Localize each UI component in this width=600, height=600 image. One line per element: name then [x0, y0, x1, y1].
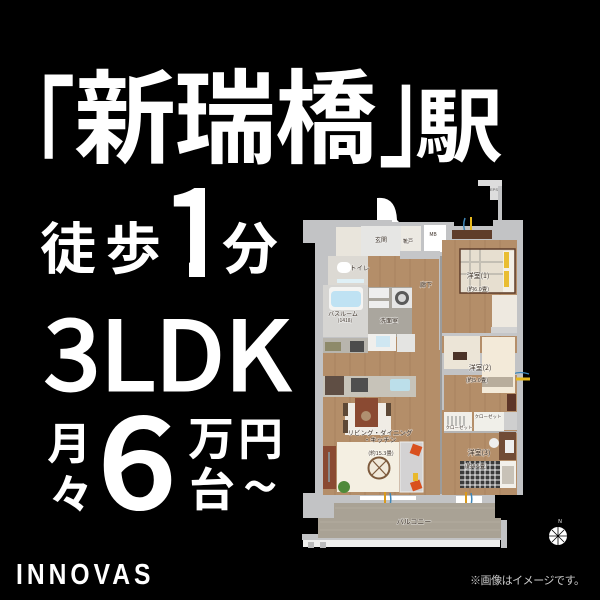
bedroom 3 [444, 431, 517, 488]
title: 新 [74, 38, 176, 185]
sofa [400, 442, 423, 492]
heading: walking time: 1 [161, 138, 232, 312]
room labels: (約15.3畳) [368, 449, 394, 457]
heading: monthly price: 万 [188, 403, 234, 469]
room labels [328, 231, 502, 527]
kitchen counter top [323, 338, 368, 353]
floor plan [302, 180, 530, 548]
room labels: (約5.0畳) [466, 376, 488, 384]
compass [549, 519, 567, 545]
living rug [337, 442, 399, 492]
heading: monthly price [47, 367, 283, 542]
toilet room [328, 256, 368, 286]
dining table [343, 398, 391, 435]
balcony [303, 503, 507, 548]
closets [444, 412, 517, 431]
heading: monthly price: 月 [47, 408, 91, 472]
PS box [491, 327, 517, 335]
heading: walking time [40, 138, 278, 312]
room labels: 洋室(2) [469, 363, 491, 373]
entrance door [377, 198, 399, 222]
title: 駅 [415, 63, 503, 179]
washroom [368, 287, 412, 337]
window arrows [384, 492, 386, 510]
bedroom 1 [452, 230, 515, 293]
window sills [360, 496, 416, 500]
compass: N [558, 519, 562, 525]
kitchen counter island [323, 376, 416, 397]
title: 」 [379, 12, 465, 191]
heading: walking time: 歩 [105, 205, 161, 286]
tv board [323, 446, 336, 489]
heading: walking time: 徒 [40, 205, 96, 286]
room labels: クローゼット [446, 424, 472, 431]
floor grain [335, 240, 500, 495]
room labels: 玄関 [375, 235, 387, 244]
round coffee table [368, 458, 390, 478]
heading: monthly price: 円 [238, 403, 283, 468]
footnote: ※画像はイメージです。 [470, 574, 585, 587]
room labels: (約4.5畳) [465, 462, 487, 470]
room labels: バルコニー [397, 517, 431, 527]
heading: monthly price: 台 [189, 454, 235, 520]
bath room [323, 285, 368, 337]
room labels: 廊下 [420, 280, 432, 289]
plant [338, 481, 350, 493]
interior wall lines [440, 256, 442, 494]
room labels: (1418) [338, 317, 353, 324]
floor plan: EPS [490, 187, 498, 192]
room labels: バスルーム [328, 309, 358, 318]
room labels: 洗面室 [380, 316, 398, 325]
bedroom 2 [442, 333, 517, 411]
room labels: クローゼット [474, 413, 502, 420]
wooden floors [323, 240, 517, 495]
outdoor unit at top [478, 180, 502, 200]
room labels: ・キッチン [364, 434, 396, 444]
room labels: 洋室(1) [467, 271, 489, 281]
heading: walking time: 分 [222, 205, 278, 286]
title [0, 12, 503, 219]
room labels: (約6.0畳) [467, 285, 489, 293]
meter box [424, 225, 446, 252]
heading: monthly price: 6 [99, 367, 174, 542]
room labels: リビング・ダイニング [348, 427, 413, 437]
room labels: トイレ [350, 262, 370, 272]
brand logo: INNOVAS [16, 558, 154, 590]
title: 瑞 [174, 38, 276, 185]
room labels: 靴戸 [403, 238, 413, 245]
heading: monthly price: ~ [243, 437, 277, 527]
walk-in closet [492, 295, 517, 327]
heading: monthly price: 々 [49, 459, 93, 523]
outer walls [302, 183, 523, 540]
room labels: 洋室(3) [468, 448, 490, 458]
title: 橋 [275, 38, 377, 185]
closet and entry tiles [336, 227, 361, 256]
heading: layout type: 3LDK [44, 281, 290, 418]
room labels: MB [429, 231, 437, 238]
